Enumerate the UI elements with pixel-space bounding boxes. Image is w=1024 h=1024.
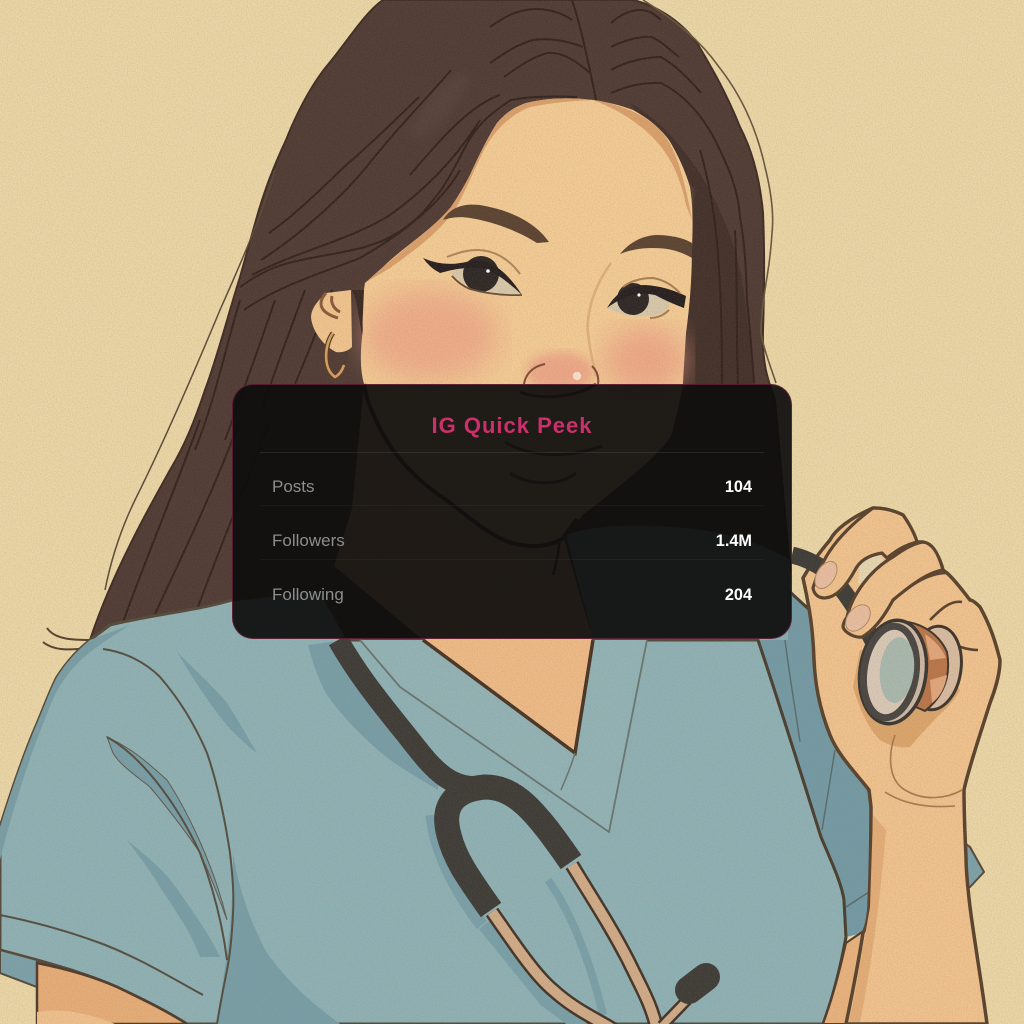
other fingers — [893, 573, 978, 650]
tube near hand — [792, 555, 875, 645]
stat row: posts: 104 — [725, 478, 752, 496]
panel: IG Quick Peek stats card — [232, 384, 792, 639]
stethoscope — [338, 640, 706, 1024]
left arm skin — [37, 963, 187, 1024]
sleeve shadow band — [0, 625, 130, 860]
hair — [43, 0, 790, 650]
heading: IG Quick Peek — [432, 413, 592, 438]
second finger — [843, 542, 943, 637]
forearm shadow — [849, 815, 886, 1022]
index finger — [813, 508, 917, 598]
side of face line — [588, 263, 611, 377]
right sleeve tip — [960, 840, 984, 890]
collar — [360, 640, 647, 832]
ear and earring — [311, 290, 364, 377]
scrub top — [0, 590, 875, 1024]
tube to yoke — [338, 640, 480, 787]
binaural tubes — [492, 865, 657, 1024]
eyebrow right — [620, 235, 692, 258]
loose hair strands — [643, 0, 776, 383]
nose — [524, 364, 598, 384]
palm shadow — [853, 650, 960, 747]
eyebrow left — [443, 205, 549, 243]
right forearm and palm — [803, 508, 1000, 1024]
cheek blush — [362, 289, 498, 381]
stethoscope shadows — [432, 815, 585, 1024]
jaw line — [364, 384, 577, 546]
mouth — [505, 384, 602, 483]
stat row: following — [272, 585, 752, 604]
stat row: followers: 1.4M — [716, 532, 752, 550]
hair flow lines — [122, 0, 754, 625]
gap between fingers — [858, 553, 884, 585]
stat row: posts: Posts — [272, 477, 315, 496]
eye right — [607, 278, 686, 318]
yoke — [447, 787, 571, 910]
shadow patches — [107, 737, 227, 920]
right side shade — [758, 590, 875, 937]
scrub top: right shoulder under panel — [566, 526, 790, 665]
stat row: followers — [272, 531, 752, 550]
palm creases — [885, 735, 962, 807]
neck and chest — [334, 384, 640, 753]
eye left — [423, 250, 522, 295]
face — [361, 98, 693, 575]
sleeve seams — [0, 649, 233, 1024]
chest piece — [853, 616, 967, 728]
stat row: following: Following — [272, 585, 344, 604]
sleeve underside — [0, 950, 37, 987]
stat row: posts — [272, 477, 752, 496]
ear tip — [689, 977, 706, 990]
lower right skin — [823, 930, 868, 1024]
stat row: followers: Followers — [272, 531, 345, 550]
stat row: following: 204 — [725, 586, 752, 604]
